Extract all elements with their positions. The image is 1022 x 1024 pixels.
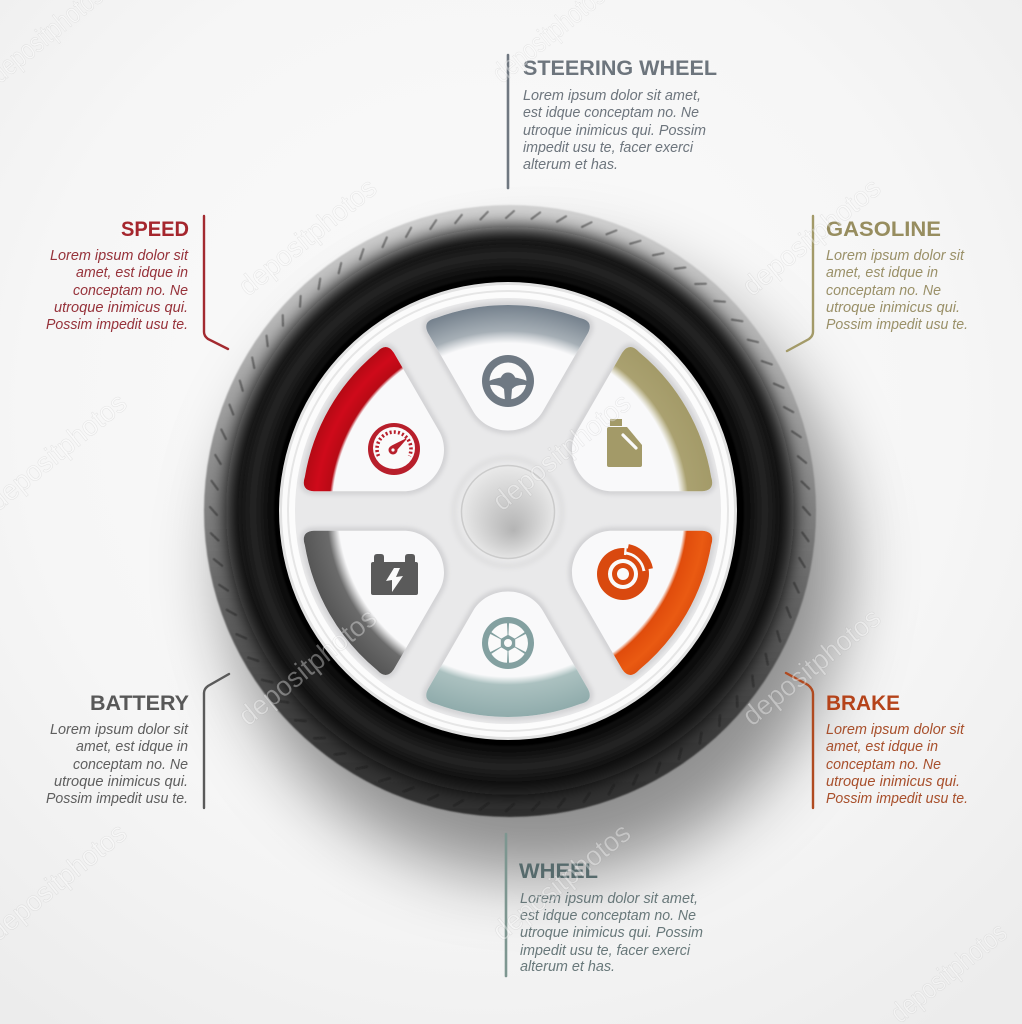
body text: utroque inimicus qui. [54, 300, 188, 316]
leader line [204, 674, 229, 808]
leader line [786, 673, 813, 808]
band: brake [537, 480, 727, 685]
heading: STEERING WHEEL [523, 57, 717, 80]
icon: speedometer [368, 423, 420, 475]
body text: utroque inimicus qui. [826, 300, 960, 316]
body text: utroque inimicus qui. [54, 774, 188, 790]
leader line [507, 55, 509, 188]
body text [826, 248, 968, 333]
body text: amet, est idque in [826, 265, 938, 281]
hub shadow ring [454, 458, 562, 566]
body text: utroque inimicus qui. [826, 774, 960, 790]
body text: Possim impedit usu te. [826, 791, 968, 807]
band: steering wheel [426, 305, 590, 430]
band: gasoline [537, 337, 727, 542]
body text: amet, est idque in [76, 739, 188, 755]
body text [826, 722, 968, 807]
leader line [787, 216, 813, 351]
heading: BRAKE [826, 692, 900, 715]
watermarks: depositphotos [232, 602, 382, 732]
body text: Lorem ipsum dolor sit [826, 722, 965, 738]
rim [279, 282, 737, 740]
body text: Possim impedit usu te. [46, 791, 188, 807]
heading: GASOLINE [826, 218, 941, 241]
icon: wheel [482, 617, 534, 669]
body text: amet, est idque in [76, 265, 188, 281]
body text: Lorem ipsum dolor sit [826, 248, 965, 264]
body text: Lorem ipsum dolor sit amet, [520, 891, 698, 907]
icon: battery [371, 554, 418, 595]
leader line [204, 216, 228, 349]
icon: gasoline can [607, 419, 642, 467]
body text [520, 891, 703, 975]
heading: BATTERY [90, 692, 189, 715]
hub cap [462, 466, 554, 558]
icon: steering wheel [482, 355, 534, 407]
band: speed [289, 337, 479, 542]
heading: WHEEL [519, 860, 598, 883]
tire [204, 205, 816, 817]
body text: utroque inimicus qui. Possim [520, 925, 703, 941]
body text: amet, est idque in [826, 739, 938, 755]
tread marks [210, 211, 810, 811]
panel: battery [46, 674, 229, 808]
body text: est idque conceptam no. Ne [523, 105, 699, 121]
body text [523, 88, 706, 173]
window shadows [289, 305, 727, 717]
rim edge rings [279, 282, 737, 740]
leader line [505, 834, 507, 976]
body text: est idque conceptam no. Ne [520, 908, 696, 924]
body text: alterum et has. [523, 157, 618, 173]
heading: SPEED [121, 218, 189, 241]
band: battery [289, 480, 479, 685]
panel: gasoline [787, 216, 968, 351]
body text: conceptam no. Ne [73, 283, 188, 299]
body text: Lorem ipsum dolor sit [50, 722, 189, 738]
panel: brake [786, 673, 968, 808]
watermarks: depositphotos [486, 387, 636, 517]
body text: conceptam no. Ne [826, 283, 941, 299]
wheel [204, 205, 816, 817]
band: wheel [426, 592, 590, 717]
body text: Lorem ipsum dolor sit amet, [523, 88, 701, 104]
body text: Possim impedit usu te. [46, 317, 188, 333]
ground shadow [225, 253, 845, 877]
watermarks: depositphotos [736, 602, 886, 732]
body text: impedit usu te, facer exerci [523, 140, 694, 156]
body text [46, 722, 189, 807]
panel: speed [46, 216, 228, 349]
body text: alterum et has. [520, 959, 615, 975]
icon: brake disc [597, 543, 649, 600]
watermarks: depositphotos [486, 817, 636, 947]
body text: utroque inimicus qui. Possim [523, 123, 706, 139]
watermarks: depositphotos [736, 172, 886, 302]
panel: wheel [506, 834, 703, 976]
body text: conceptam no. Ne [73, 757, 188, 773]
body text [46, 248, 189, 333]
watermarks: depositphotos [232, 172, 382, 302]
body text: conceptam no. Ne [826, 757, 941, 773]
body text: impedit usu te, facer exerci [520, 943, 691, 959]
windows [289, 305, 727, 717]
body text: Lorem ipsum dolor sit [50, 248, 189, 264]
body text: Possim impedit usu te. [826, 317, 968, 333]
panel: steering wheel [508, 55, 717, 188]
